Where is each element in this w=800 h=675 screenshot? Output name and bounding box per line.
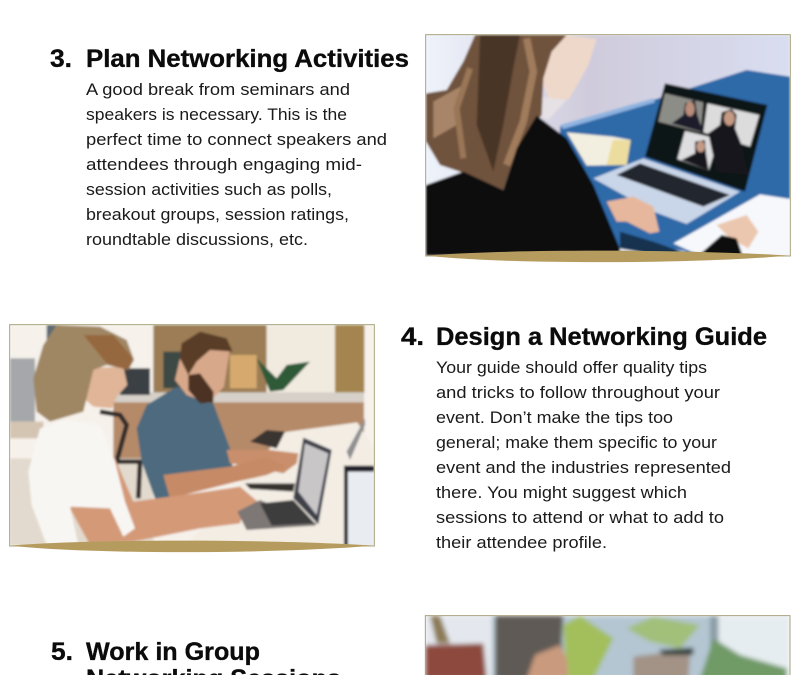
step 3 body text: breakout groups, session ratings, (86, 205, 349, 224)
step 3 body text: speakers is necessary. This is the (86, 105, 347, 124)
step 4 body text: their attendee profile. (436, 533, 607, 552)
step 4 body text: there. You might suggest which (436, 483, 687, 502)
frame (426, 35, 790, 256)
gold swoosh (426, 251, 790, 262)
step 4 body text: sessions to attend or what to add to (436, 508, 724, 527)
step 4 body text: Your guide should offer quality tips (436, 358, 707, 377)
step 3 body text: attendees through engaging mid- (86, 155, 362, 174)
step 5 heading: Work in Group (86, 638, 260, 666)
gold swoosh (10, 541, 374, 552)
step 4 body text: and tricks to follow throughout your (436, 383, 720, 402)
photo: woman on video call with laptop (426, 35, 790, 262)
frame (425, 616, 790, 675)
panel: step 5 text (51, 638, 341, 675)
step 4 number: 4. (401, 323, 424, 351)
step 5 number: 5. (51, 638, 73, 666)
step 4 body text: general; make them specific to your (436, 433, 717, 452)
frame (10, 325, 374, 546)
photo: man at desk with plants (425, 616, 790, 675)
panel: step 3 text (50, 45, 409, 249)
step 4 heading: Design a Networking Guide (436, 323, 767, 351)
step 3 number: 3. (50, 45, 72, 73)
panel: step 4 text (401, 323, 767, 552)
step 3 body text: session activities such as polls, (86, 180, 332, 199)
step 3 heading: Plan Networking Activities (86, 45, 409, 73)
step 4 body text (436, 358, 731, 552)
step 4 body text: event. Don’t make the tips too (436, 408, 673, 427)
step 4 body text: event and the industries represented (436, 458, 731, 477)
step 3 body text: A good break from seminars and (86, 80, 350, 99)
step 3 body text (86, 80, 387, 249)
step 3 body text: perfect time to connect speakers and (86, 130, 387, 149)
photo: two people working on laptops in a cafe (10, 325, 374, 552)
step 3 body text: roundtable discussions, etc. (86, 230, 308, 249)
